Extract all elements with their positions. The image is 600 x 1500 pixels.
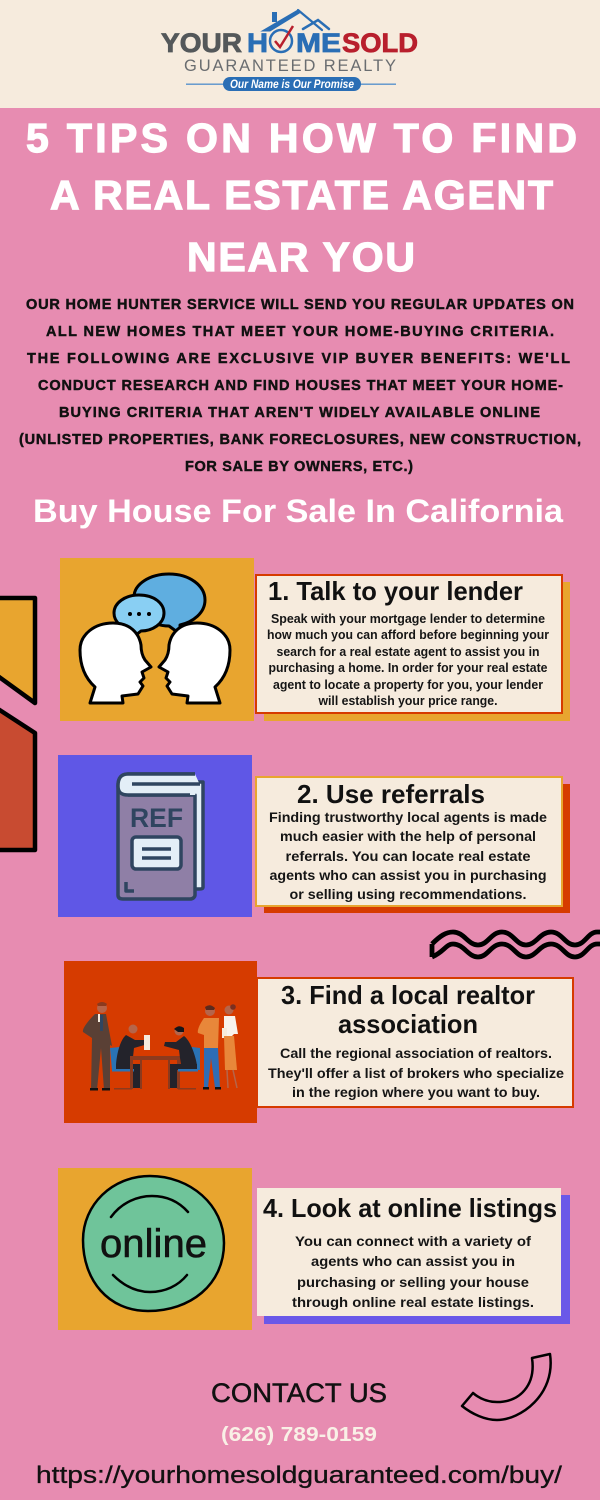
intro text block: FOR SALE BY OWNERS, ETC.) — [185, 459, 413, 475]
title — [26, 115, 577, 280]
header band with logo — [0, 0, 600, 108]
book plate — [132, 837, 181, 869]
tip 1 text: Speak with your mortgage lender to determine — [271, 611, 545, 626]
tip 4 text: You can connect with a variety of — [295, 1233, 531, 1249]
tip 1 heading: 1. Talk to your lender — [268, 576, 523, 606]
logo wordmark: SOLD — [342, 28, 418, 58]
tip 3 text — [268, 1045, 564, 1100]
panel: tip 1 image — [60, 558, 254, 721]
illustration: standing man — [83, 1002, 112, 1090]
logo wordmark — [161, 26, 418, 58]
tip 3 text: They'll offer a list of brokers who specialize — [268, 1065, 564, 1081]
subheading: Buy House For Sale In California — [33, 493, 563, 529]
logo tagline: Our Name is Our Promise — [230, 79, 355, 91]
contact heading: CONTACT US — [211, 1378, 387, 1408]
illustration: standing man in orange — [198, 1005, 221, 1090]
intro text block — [19, 297, 581, 475]
intro text block: ALL NEW HOMES THAT MEET YOUR HOME-BUYING CRITERIA. — [46, 324, 554, 340]
phone number: (626) 789-0159 — [221, 1424, 377, 1446]
tip 2 text — [269, 809, 547, 902]
book label: REF — [130, 803, 183, 833]
decorative house shape — [0, 598, 35, 850]
tip 2 text: Finding trustworthy local agents is made — [269, 809, 547, 825]
logo wordmark: H — [247, 28, 268, 58]
intro text block: OUR HOME HUNTER SERVICE WILL SEND YOU REGULAR UPDATES ON — [26, 297, 574, 313]
tip 1 text: agent to locate a property for you, your lender — [273, 677, 543, 692]
icon: right head — [159, 623, 230, 703]
tip 2 text: referrals. You can locate real estate — [286, 848, 531, 864]
tip 3 heading: association — [338, 1009, 478, 1039]
tip 1 text — [267, 611, 549, 708]
panel: tip 3 image — [64, 961, 257, 1123]
logo tagline — [186, 77, 396, 91]
logo subtitle: GUARANTEED REALTY — [184, 57, 396, 75]
title: A REAL ESTATE AGENT — [50, 172, 553, 218]
logo roof — [262, 10, 329, 31]
panel: tip 2 image — [58, 755, 252, 917]
tip 1 text: purchasing a home. In order for your real estate — [268, 660, 548, 675]
tip 2 text: or selling using recommendations. — [290, 886, 526, 902]
icon: speech bubbles — [114, 574, 205, 638]
logo wordmark: ME — [296, 28, 341, 58]
tip 3 text: in the region where you want to buy. — [292, 1084, 540, 1100]
tip 1 text: will establish your price range. — [318, 693, 498, 708]
title: 5 TIPS ON HOW TO FIND — [26, 115, 577, 161]
tip 1 text: how much you can afford before beginning your — [267, 627, 549, 642]
logo wordmark: YOUR — [161, 28, 242, 58]
tip 1 text: search for a real estate agent to assist you in — [276, 644, 540, 659]
panel: tip 4 image — [58, 1168, 252, 1330]
icon: online badge: online — [100, 1222, 207, 1266]
decorative arc — [462, 1354, 551, 1420]
intro text block: BUYING CRITERIA THAT AREN'T WIDELY AVAILABLE ONLINE — [59, 405, 540, 421]
intro text block: CONDUCT RESEARCH AND FIND HOUSES THAT MEET YOUR HOME- — [38, 378, 563, 394]
tip 2 text: agents who can assist you in purchasing — [270, 867, 546, 883]
tip 2 text: much easier with the help of personal — [280, 828, 536, 844]
tip 3 heading: 3. Find a local realtor — [281, 980, 535, 1010]
panel: tip 1 card — [256, 575, 570, 721]
illustration: seated man right — [164, 1026, 200, 1088]
intro text block: (UNLISTED PROPERTIES, BANK FORECLOSURES, NEW CONSTRUCTION, — [19, 432, 581, 448]
panel: tip 3 card — [257, 978, 573, 1107]
panel: tip 2 card — [256, 777, 570, 913]
tip 4 text: through online real estate listings. — [292, 1294, 534, 1310]
tip 4 text: agents who can assist you in — [311, 1253, 515, 1269]
illustration: standing woman — [222, 1004, 238, 1088]
tip 3 heading — [281, 980, 535, 1039]
decorative wave — [432, 932, 600, 957]
icon: left head — [80, 623, 151, 703]
tip 4 heading: 4. Look at online listings — [263, 1193, 557, 1223]
intro text block: THE FOLLOWING ARE EXCLUSIVE VIP BUYER BENEFITS: WE'LL — [27, 351, 570, 367]
title: NEAR YOU — [187, 234, 415, 280]
tip 3 text: Call the regional association of realtors. — [280, 1045, 552, 1061]
icon: online badge — [83, 1176, 224, 1311]
illustration: table — [114, 1056, 196, 1090]
illustration: seated man left — [110, 1024, 150, 1088]
tip 4 text — [292, 1233, 534, 1310]
tip 4 text: purchasing or selling your house — [297, 1274, 529, 1290]
website: https://yourhomesoldguaranteed.com/buy/ — [36, 1462, 562, 1489]
tip 2 heading: 2. Use referrals — [297, 779, 485, 809]
icon: reference book — [118, 774, 203, 899]
panel: tip 4 card — [257, 1188, 570, 1324]
